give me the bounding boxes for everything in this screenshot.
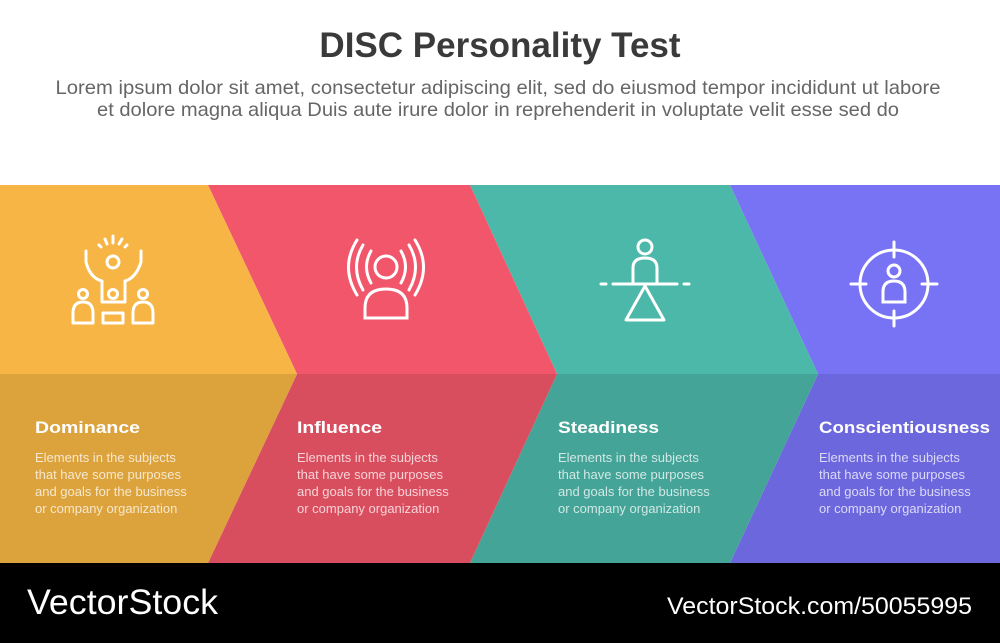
text: Conscientiousness: Elements in the subjects — [819, 450, 960, 465]
text: Influence: that have some purposes — [297, 467, 443, 482]
subtitle — [56, 77, 940, 121]
text: Influence — [297, 418, 449, 516]
text: Steadiness: that have some purposes — [558, 467, 704, 482]
title: DISC Personality Test — [319, 26, 681, 65]
text: Influence: and goals for the business — [297, 484, 449, 499]
text: Dominance: Elements in the subjects — [35, 450, 176, 465]
text: Steadiness: Steadiness — [558, 418, 659, 437]
icon: crowd — [73, 236, 153, 323]
text: Conscientiousness: or company organization — [819, 501, 961, 516]
footer — [0, 563, 1000, 643]
footer: VectorStock — [27, 583, 219, 622]
text: Conscientiousness — [819, 418, 990, 516]
panel: red — [208, 185, 557, 563]
footer: VectorStock.com/50055995 — [667, 593, 972, 620]
panel: purple — [730, 185, 1000, 563]
text: Dominance — [35, 418, 187, 516]
text: Conscientiousness: that have some purposes — [819, 467, 965, 482]
text: Dominance: or company organization — [35, 501, 177, 516]
text: Steadiness: or company organization — [558, 501, 700, 516]
panel: teal — [470, 185, 818, 563]
icon: target person — [851, 242, 937, 326]
subtitle: et dolore magna aliqua Duis aute irure dolor in reprehenderit in voluptate velit esse sed do — [97, 99, 899, 121]
text: Dominance: that have some purposes — [35, 467, 181, 482]
text: Influence: Elements in the subjects — [297, 450, 438, 465]
panel: orange — [0, 185, 297, 563]
text: Conscientiousness: Conscientiousness — [819, 418, 990, 437]
subtitle: Lorem ipsum dolor sit amet, consectetur adipiscing elit, sed do eiusmod tempor incididunt ut labore — [56, 77, 940, 99]
text: Dominance: Dominance — [35, 418, 140, 437]
text: Conscientiousness: and goals for the business — [819, 484, 971, 499]
text: Influence: or company organization — [297, 501, 439, 516]
text: Influence: Influence — [297, 418, 382, 437]
text: Steadiness: Elements in the subjects — [558, 450, 699, 465]
icon: balance — [601, 240, 689, 320]
text: Steadiness: and goals for the business — [558, 484, 710, 499]
text: Dominance: and goals for the business — [35, 484, 187, 499]
text: Steadiness — [558, 418, 710, 516]
icon: broadcast person — [348, 240, 424, 318]
